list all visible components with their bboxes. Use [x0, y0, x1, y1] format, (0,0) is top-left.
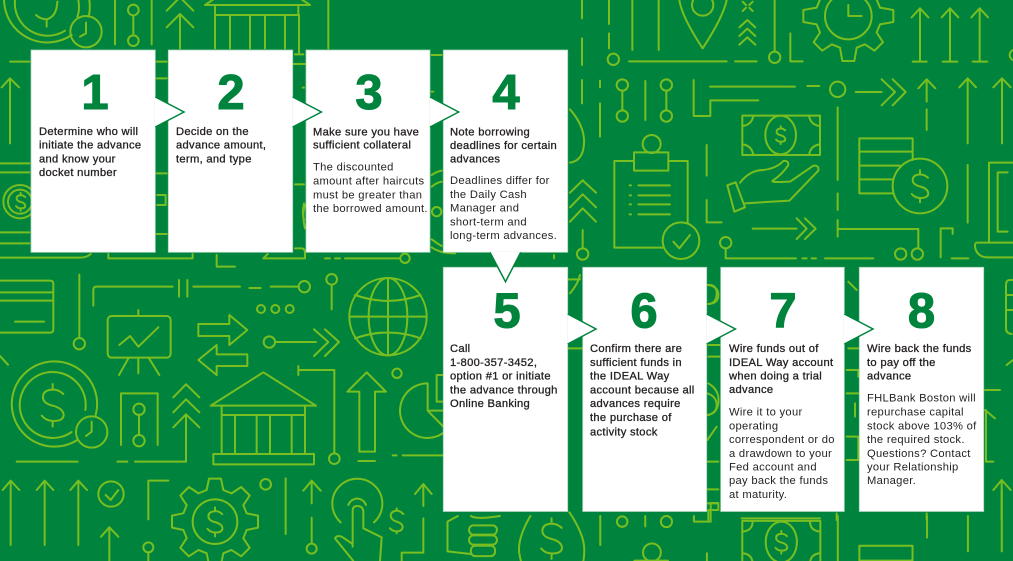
- icon: banknote: [742, 521, 820, 561]
- step 7 body: pay back the funds: [729, 475, 828, 487]
- arrow: step 2 to 3: [292, 97, 321, 127]
- connector nodes: [74, 274, 337, 349]
- icon: small chevrons: [739, 20, 755, 45]
- step 2 text: term, and type: [176, 154, 252, 166]
- arrow: step 3 to 4: [430, 97, 459, 127]
- background icon pattern: bottom right: [447, 490, 1002, 561]
- step 7 heading: Wire funds out of: [729, 343, 819, 355]
- icon: door slider: [121, 393, 158, 446]
- icon: triple chevron up line: [17, 384, 199, 462]
- step 8 body: FHLBank Boston will: [867, 392, 976, 404]
- icon: clipboard top: [634, 544, 668, 561]
- step 6 text: activity stock: [590, 426, 658, 438]
- nodes: [608, 52, 780, 65]
- step 1 text: initiate the advance: [39, 140, 141, 152]
- step 5 card: [443, 267, 568, 512]
- icon: double chevron arrow: [264, 329, 339, 356]
- icon: dollar with clock: [12, 361, 107, 448]
- gap fragments beside row two, left: [432, 247, 720, 415]
- three dots: [257, 305, 294, 313]
- node edge: [1010, 50, 1013, 60]
- step 4 body: Manager and: [450, 203, 519, 215]
- icon: money bag: [519, 512, 584, 561]
- step 7 body: Wire it to your: [729, 406, 803, 418]
- step 5 text: the advance through: [450, 384, 558, 396]
- step 1 text: Determine who will: [39, 126, 138, 138]
- icon: money bag side and chevrons: [570, 109, 596, 248]
- corner line: [148, 481, 168, 519]
- step 3 heading: Make sure you have: [313, 126, 419, 138]
- arrow: step 1 to 2: [155, 97, 184, 127]
- step 2 text: Decide on the: [176, 126, 249, 138]
- arrow: step 4 to 5: [490, 252, 521, 282]
- icon: laptop: [968, 163, 1013, 257]
- icon: location pin: [679, 0, 727, 48]
- short lines: [707, 145, 816, 239]
- background icon pattern: top right: [570, 0, 1013, 260]
- icon: presentation board: [108, 310, 171, 375]
- step 4 body: short-term and: [450, 216, 527, 228]
- step 6 text: advances require: [590, 398, 681, 410]
- step 8 heading: Wire back the funds: [867, 343, 972, 355]
- arrow: step 6 to 7: [706, 314, 735, 344]
- step 8 card: [859, 267, 984, 512]
- step 6 text: the IDEAL Way: [590, 370, 670, 382]
- bottom arrows: [101, 484, 432, 561]
- step 1 card: [31, 50, 155, 252]
- gap fragments around card 3 and 4: [293, 55, 442, 263]
- arrow: step 5 to 6: [567, 314, 596, 344]
- background icon pattern: top left: [0, 0, 328, 267]
- icon: credit card: [0, 281, 53, 333]
- icon: open hand: [727, 161, 818, 212]
- nodes and lines: [600, 503, 718, 561]
- step 6 text: Confirm there are: [590, 343, 682, 355]
- step 3 body: the borrowed amount.: [313, 203, 428, 215]
- step 7 card: 7: [769, 284, 797, 338]
- step 7 card: [721, 267, 844, 512]
- up arrows row: [3, 481, 87, 545]
- step 8 heading: to pay off the: [867, 357, 936, 369]
- arrow: step 7 to 8: [844, 314, 873, 344]
- icon: check badge: [98, 481, 124, 507]
- node: [392, 369, 402, 378]
- step 7 body: at maturity.: [729, 489, 787, 501]
- step 5 text: 1-800-357-3452,: [450, 357, 537, 369]
- icon: clock gear: [803, 0, 893, 61]
- icon: pie chart: [400, 375, 447, 438]
- step 5 card: 5: [493, 284, 521, 338]
- connectors: [838, 107, 923, 260]
- icon: chevrons top: [167, 0, 193, 48]
- step 4 body: the Daily Cash: [450, 189, 527, 201]
- step 8 body: your Relationship: [867, 462, 959, 474]
- step 3 body: amount after haircuts: [313, 175, 424, 187]
- step 7 body: a drawdown to your: [729, 448, 832, 460]
- step 4 heading: deadlines for certain: [450, 140, 557, 152]
- background icon pattern: lower left: [0, 274, 447, 561]
- vertical lines: [582, 0, 803, 65]
- icon: banknote: [742, 116, 820, 155]
- step 3 body: must be greater than: [313, 189, 422, 201]
- step 7 heading: IDEAL Way account: [729, 357, 834, 369]
- nodes: [400, 207, 441, 263]
- icon: dollar clock top: [4, 0, 102, 47]
- step 6 text: the purchase of: [590, 412, 672, 424]
- step 1 card: 1: [81, 66, 109, 120]
- step 7 body: correspondent or do: [729, 434, 835, 446]
- step 5 text: Call: [450, 343, 470, 355]
- small dollar coin: [3, 185, 37, 218]
- step 2 card: 2: [217, 66, 245, 120]
- icon: large up arrow: [347, 372, 386, 452]
- step 8 heading: advance: [867, 370, 911, 382]
- step 2 card: [168, 50, 293, 252]
- icon: slider top: [115, 0, 152, 46]
- icon: small star: [743, 2, 753, 11]
- nodes and lines near gear: [260, 478, 321, 554]
- connector to node: [298, 366, 340, 464]
- connector lines: [0, 275, 332, 365]
- step 2 text: advance amount,: [176, 140, 266, 152]
- step 3 body: The discounted: [313, 162, 394, 174]
- icon: fist: [447, 516, 500, 556]
- step 4 card: 4: [492, 66, 520, 120]
- step 6 card: 6: [630, 284, 658, 338]
- step 1 text: and know your: [39, 154, 116, 166]
- step 5 text: option #1 or initiate: [450, 370, 551, 382]
- gap fragments: [157, 62, 304, 234]
- step 5 text: Online Banking: [450, 398, 530, 410]
- up arrows top: [912, 8, 988, 62]
- step 8 body: stock above 103% of: [867, 420, 977, 432]
- icon: coin stack top: [838, 490, 1002, 561]
- step 7 heading: advance: [729, 384, 773, 396]
- icon: bank top: [205, 0, 328, 54]
- icon: exchange arrows: [198, 315, 247, 375]
- step 3 heading: sufficient collateral: [313, 140, 411, 152]
- icon: small dollar: [390, 508, 403, 533]
- step 6 text: sufficient funds in: [590, 357, 682, 369]
- step 4 body: Deadlines differ for: [450, 175, 550, 187]
- step 8 card: 8: [908, 284, 935, 338]
- sliders: [582, 79, 672, 137]
- dashes: [358, 455, 443, 461]
- step 7 body: operating: [729, 420, 778, 432]
- step 4 body: long-term advances.: [450, 230, 557, 242]
- nodes and lines above row two: [577, 228, 968, 260]
- stepped lines: [694, 80, 819, 116]
- step 8 body: repurchase capital: [867, 406, 964, 418]
- icon: dollar gear: [172, 479, 258, 561]
- step 8 body: the required stock.: [867, 434, 965, 446]
- step 1 text: docket number: [39, 167, 117, 179]
- step 8 body: Questions? Contact: [867, 448, 971, 460]
- step 8 body: Manager.: [867, 475, 916, 487]
- icon: coin stack: [859, 138, 947, 213]
- step 4 heading: Note borrowing: [450, 126, 530, 138]
- icon: touch hand: [332, 479, 382, 561]
- step 4 heading: advances: [450, 154, 500, 166]
- icon: globe: [349, 278, 427, 355]
- step 3 card: 3: [355, 66, 383, 120]
- step 3 card: [306, 50, 430, 252]
- up arrows: [918, 78, 1011, 143]
- step 6 card: [583, 267, 707, 512]
- icon: bank: [211, 372, 316, 464]
- gap fragments beside row two, right: [707, 280, 1013, 520]
- step 6 text: account because all: [590, 384, 695, 396]
- step 7 body: Fed account and: [729, 462, 817, 474]
- left margin arrow and dashes: [0, 62, 29, 243]
- step 7 heading: when doing a trial: [728, 370, 822, 382]
- lines under first row: [0, 248, 305, 267]
- icon: clipboard with check: [614, 135, 699, 259]
- step 4 card: [443, 50, 568, 252]
- chevron arrow: [830, 79, 906, 105]
